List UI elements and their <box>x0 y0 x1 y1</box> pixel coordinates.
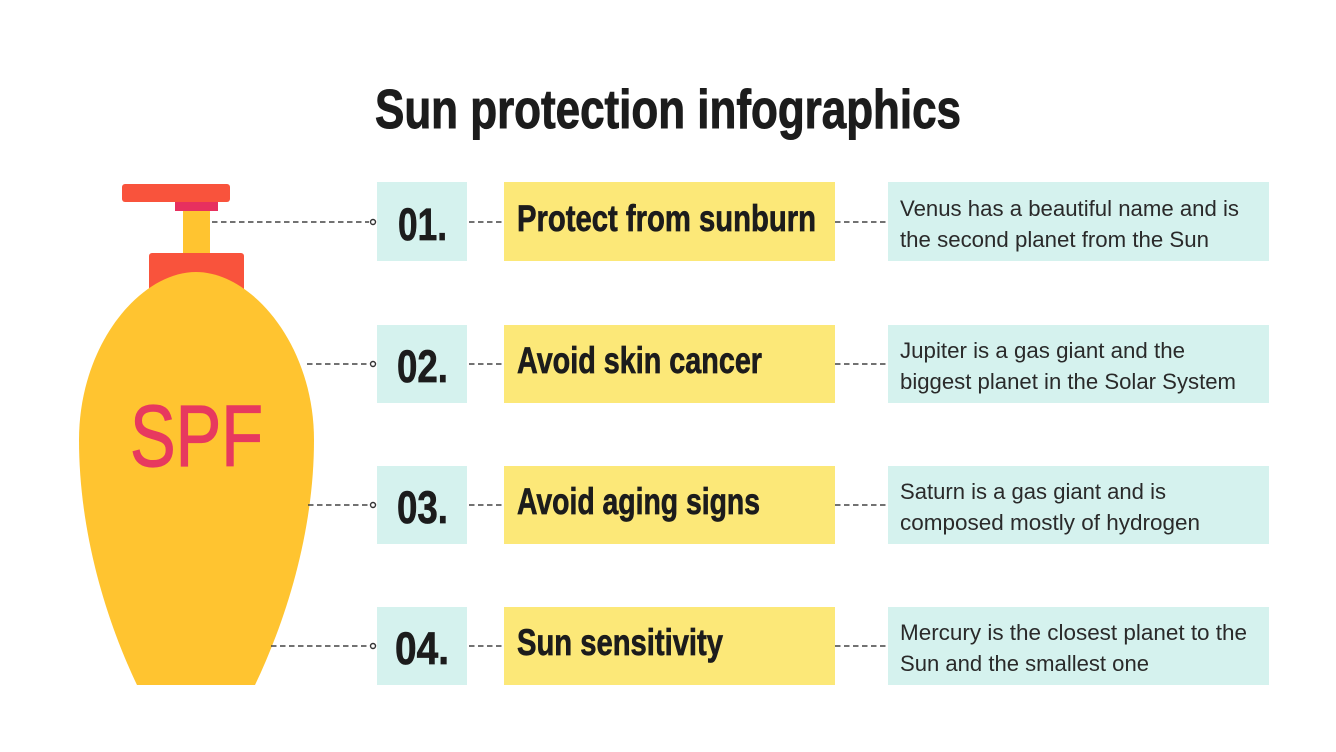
row 2: Avoid skin cancer <box>517 340 762 381</box>
row 1: 01. <box>398 199 447 250</box>
row 4: Sun and the smallest one <box>900 651 1149 676</box>
row 1 <box>212 182 1269 261</box>
row 2: biggest planet in the Solar System <box>900 369 1236 394</box>
row 4 <box>271 607 1269 685</box>
row 2: Jupiter is a gas giant and the <box>900 338 1185 363</box>
row 2 <box>307 325 1269 403</box>
row 3: Saturn is a gas giant and is <box>900 479 1166 504</box>
connector: bottle to number 4 <box>271 644 376 648</box>
row 3: composed mostly of hydrogen <box>900 510 1200 535</box>
row 3 <box>308 466 1269 544</box>
row 1: Protect from sunburn <box>517 198 816 239</box>
connector: bottle to number 1 <box>212 220 376 224</box>
row 1: the second planet from the Sun <box>900 227 1209 252</box>
row 3: 03. <box>397 482 448 533</box>
row 4: Mercury is the closest planet to the <box>900 620 1247 645</box>
icon: sunscreen bottle <box>79 184 314 685</box>
row 3: Avoid aging signs <box>517 481 760 522</box>
row 2: 02. <box>397 341 448 392</box>
icon: sunscreen bottle: SPF <box>130 388 263 485</box>
row 4: Sun sensitivity <box>517 622 723 663</box>
row 1: Venus has a beautiful name and is <box>900 196 1239 221</box>
connector: bottle to number 3 <box>308 502 376 508</box>
row 4: 04. <box>395 623 449 674</box>
connector: bottle to number 2 <box>307 362 376 366</box>
title: Sun protection infographics <box>375 78 961 140</box>
